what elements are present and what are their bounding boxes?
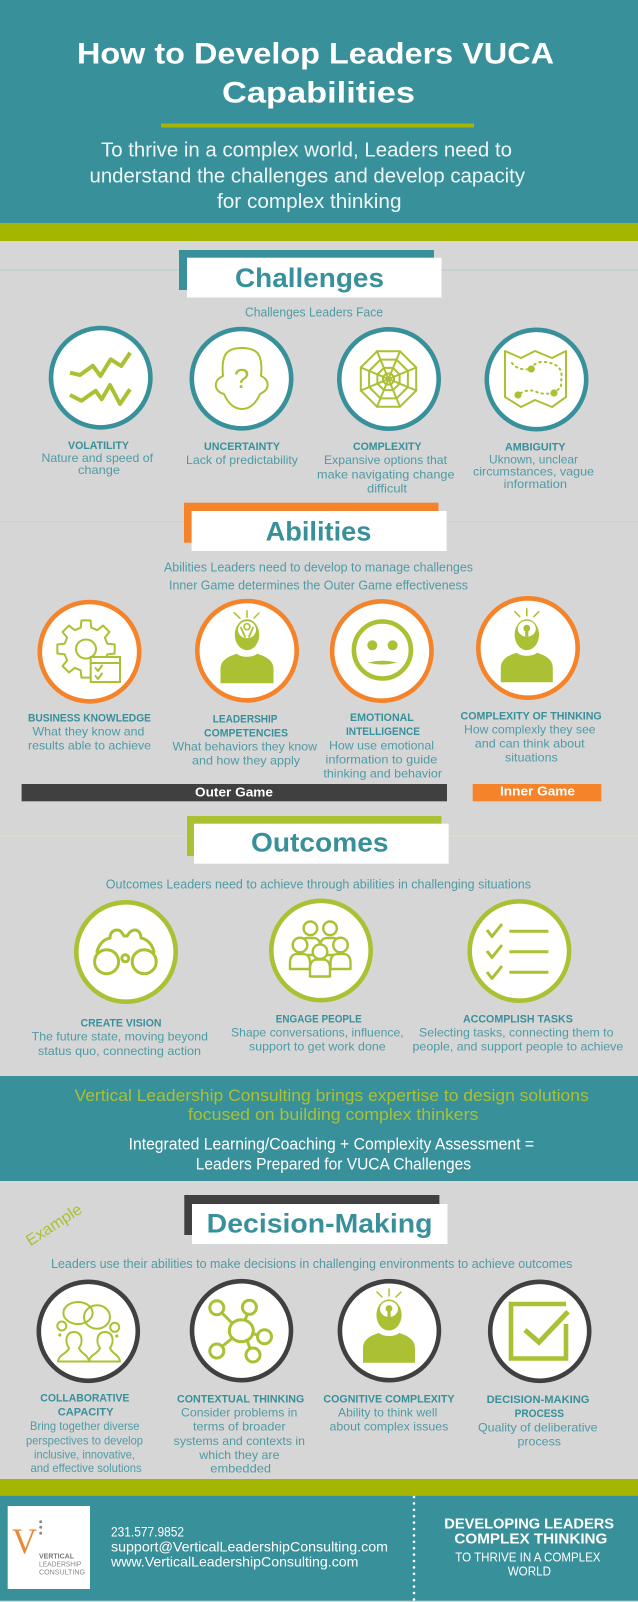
label: collaborative capacity: inclusive, innovative, — [34, 1447, 135, 1461]
label: ambiguity: information — [504, 477, 567, 491]
label: create vision — [32, 1018, 208, 1058]
label: engage people: support to get work done — [249, 1040, 386, 1054]
bar: outer game: Outer Game — [195, 784, 273, 799]
label: leadership competencies: and how they apply — [192, 754, 300, 768]
panel: challenges — [0, 250, 638, 496]
icon: accomplish tasks checklist — [470, 901, 569, 1001]
footer tagline — [444, 1517, 614, 1578]
label: cognitive complexity: COGNITIVE COMPLEXITY — [323, 1393, 455, 1405]
heading: challenges: Challenges — [235, 263, 384, 293]
label: contextual thinking: Consider problems in — [181, 1406, 297, 1420]
label: uncertainty: Lack of predictability — [186, 453, 298, 467]
icon: business knowledge gear — [40, 602, 139, 701]
subtitle: To thrive in a complex world, Leaders need to — [101, 139, 512, 162]
label: collaborative capacity: CAPACITY — [58, 1407, 114, 1419]
footer tagline: COMPLEX THINKING — [454, 1531, 607, 1547]
label: emotional intelligence: information to guide — [326, 752, 438, 766]
label: emotional intelligence: How use emotional — [329, 738, 434, 752]
label: volatility: VOLATILITY — [68, 440, 130, 452]
label: contextual thinking: terms of broader — [193, 1420, 286, 1434]
label: cognitive complexity: Ability to think well — [338, 1406, 437, 1420]
label: cognitive complexity — [323, 1393, 455, 1434]
title underline — [161, 124, 474, 128]
label: complexity: Expansive options that — [324, 453, 448, 467]
panel: outcomes — [0, 816, 638, 1058]
label: business knowledge: What they know and — [32, 724, 144, 738]
callout: expertise: Vertical Leadership Consulting brings expertise to design solutions — [74, 1086, 589, 1105]
panel: decision-making — [23, 1195, 598, 1476]
label: collaborative capacity: perspectives to develop — [26, 1433, 143, 1447]
title — [77, 38, 554, 110]
label: complexity: COMPLEXITY — [353, 441, 422, 453]
logo: LEADERSHIP — [39, 1560, 81, 1569]
icon: engage people — [271, 901, 371, 1000]
label: accomplish tasks: Selecting tasks, connecting them to — [419, 1026, 614, 1040]
logo — [8, 1506, 90, 1589]
label: complexity of thinking: and can think about — [475, 736, 585, 750]
subtitle: for complex thinking — [217, 190, 402, 213]
heading: challenges — [179, 250, 442, 298]
callout: expertise: focused on building complex thinkers — [188, 1105, 478, 1124]
label: collaborative capacity — [26, 1393, 143, 1475]
logo: VERTICAL — [39, 1551, 74, 1560]
bar: outer game — [22, 784, 447, 801]
heading: outcomes — [187, 816, 449, 864]
label: decision-making process: PROCESS — [515, 1408, 564, 1420]
icon: uncertainty — [192, 329, 291, 428]
label: collaborative capacity: Bring together diverse — [30, 1419, 140, 1433]
label: cognitive complexity: about complex issues — [330, 1420, 448, 1434]
subtitle — [90, 139, 526, 213]
label: contextual thinking: systems and contexts in — [174, 1434, 305, 1448]
footer tagline: TO THRIVE IN A COMPLEX — [455, 1550, 601, 1565]
label: decision-making process: DECISION-MAKING — [487, 1394, 590, 1406]
icon: contextual thinking network — [192, 1281, 291, 1380]
subtitle: understand the challenges and develop capacity — [90, 165, 526, 188]
label: contextual thinking: CONTEXTUAL THINKING — [177, 1393, 304, 1405]
contact details — [110, 1524, 388, 1570]
abilities intro — [164, 561, 473, 592]
challenges intro: Challenges Leaders Face — [245, 306, 383, 320]
label: complexity: difficult — [367, 482, 408, 496]
label: engage people: Shape conversations, influence, — [231, 1026, 404, 1040]
example tag: Example — [23, 1201, 85, 1250]
title: How to Develop Leaders VUCA — [77, 38, 554, 70]
label: leadership competencies — [172, 713, 317, 768]
label: volatility: Nature and speed of — [42, 451, 154, 465]
heading: abilities: Abilities — [266, 517, 371, 547]
label: accomplish tasks: ACCOMPLISH TASKS — [463, 1014, 573, 1026]
label: volatility — [42, 440, 154, 477]
label: emotional intelligence — [323, 712, 442, 780]
outcomes intro: Outcomes Leaders need to achieve through abilities in challenging situations — [106, 878, 531, 892]
contact details: support@VerticalLeadershipConsulting.com — [111, 1539, 388, 1555]
icon: volatility — [51, 328, 150, 427]
label: engage people — [231, 1014, 404, 1054]
label: uncertainty: UNCERTAINTY — [204, 441, 281, 453]
icon: cognitive complexity — [340, 1281, 439, 1380]
label: engage people: ENGAGE PEOPLE — [276, 1014, 362, 1026]
contact details: www.VerticalLeadershipConsulting.com — [110, 1554, 358, 1570]
label: emotional intelligence: thinking and behavior — [323, 766, 442, 780]
panel: expertise callout — [0, 1076, 638, 1181]
label: leadership competencies: What behaviors they know — [172, 740, 317, 754]
label: complexity: make navigating change — [317, 467, 455, 481]
label: complexity of thinking: situations — [505, 751, 558, 765]
panel: abilities — [0, 503, 638, 801]
label: business knowledge — [28, 713, 151, 752]
icon: complexity web — [339, 329, 439, 429]
label: emotional intelligence: INTELLIGENCE — [346, 726, 420, 738]
contact details: 231.577.9852 — [111, 1524, 184, 1540]
green band — [0, 223, 638, 241]
label: volatility: change — [78, 463, 120, 477]
label: decision-making process: process — [518, 1434, 561, 1448]
decision-making intro: Leaders use their abilities to make decisions in challenging environments to achieve outcomes — [51, 1257, 572, 1271]
callout: expertise — [74, 1086, 589, 1124]
label: complexity — [317, 441, 455, 496]
label: decision-making process: Quality of deliberative — [478, 1420, 598, 1434]
footer tagline: DEVELOPING LEADERS — [444, 1517, 614, 1533]
label: ambiguity: AMBIGUITY — [505, 442, 566, 454]
title: Capabilities — [222, 77, 415, 110]
label: contextual thinking: embedded — [210, 1462, 271, 1476]
label: accomplish tasks: people, and support people to achieve — [412, 1040, 624, 1054]
icon: ambiguity map — [487, 330, 586, 429]
icon: decision-making process checkbox — [490, 1282, 589, 1381]
header panel — [0, 0, 638, 223]
icon: create vision binoculars — [76, 902, 176, 1002]
label: uncertainty — [186, 441, 298, 467]
label: collaborative capacity: and effective solutions — [30, 1461, 142, 1475]
panel: footer — [0, 1496, 638, 1601]
heading: decision-making: Decision-Making — [207, 1208, 432, 1238]
label: contextual thinking — [174, 1393, 305, 1476]
label: create vision: The future state, moving beyond — [32, 1030, 208, 1044]
label: create vision: CREATE VISION — [80, 1018, 162, 1030]
label: ambiguity: circumstances, vague — [473, 465, 594, 479]
label: complexity of thinking: COMPLEXITY OF THINKING — [460, 710, 602, 722]
label: leadership competencies: LEADERSHIP — [213, 713, 278, 725]
callout: formula: Leaders Prepared for VUCA Challenges — [196, 1156, 471, 1174]
label: ambiguity: Uknown, unclear — [489, 452, 578, 466]
label: collaborative capacity: COLLABORATIVE — [40, 1393, 129, 1405]
bar: inner game: Inner Game — [500, 784, 575, 798]
logo: CONSULTING — [39, 1568, 85, 1577]
callout: formula — [129, 1135, 534, 1174]
label: business knowledge: results able to achieve — [28, 738, 151, 752]
label: ambiguity — [473, 442, 594, 491]
callout: formula: Integrated Learning/Coaching + Complexity Assessment = — [129, 1135, 534, 1153]
heading: outcomes: Outcomes — [251, 828, 388, 858]
logo: V — [12, 1521, 37, 1561]
icon: leadership competencies — [197, 601, 297, 700]
footer tagline: WORLD — [508, 1563, 551, 1578]
heading: abilities — [184, 503, 447, 551]
icon: collaborative capacity — [39, 1282, 138, 1381]
icon: uncertainty: ? — [234, 363, 249, 394]
label: complexity of thinking — [460, 710, 602, 765]
heading: decision-making — [184, 1195, 448, 1244]
label: create vision: status quo, connecting action — [38, 1044, 201, 1058]
label: emotional intelligence: EMOTIONAL — [350, 712, 414, 724]
label: complexity of thinking: How complexly they see — [464, 722, 596, 736]
abilities intro: Abilities Leaders need to develop to manage challenges — [164, 561, 473, 575]
abilities intro: Inner Game determines the Outer Game effectiveness — [169, 578, 468, 592]
label: business knowledge: BUSINESS KNOWLEDGE — [28, 713, 151, 725]
icon: complexity of thinking — [478, 598, 578, 698]
icon: emotional intelligence face — [332, 601, 431, 701]
green band — [0, 1479, 638, 1496]
bar: inner game — [473, 784, 601, 801]
label: accomplish tasks — [412, 1014, 624, 1054]
label: contextual thinking: which they are — [198, 1448, 280, 1462]
label: leadership competencies: COMPETENCIES — [204, 727, 288, 739]
label: decision-making process — [478, 1394, 598, 1448]
